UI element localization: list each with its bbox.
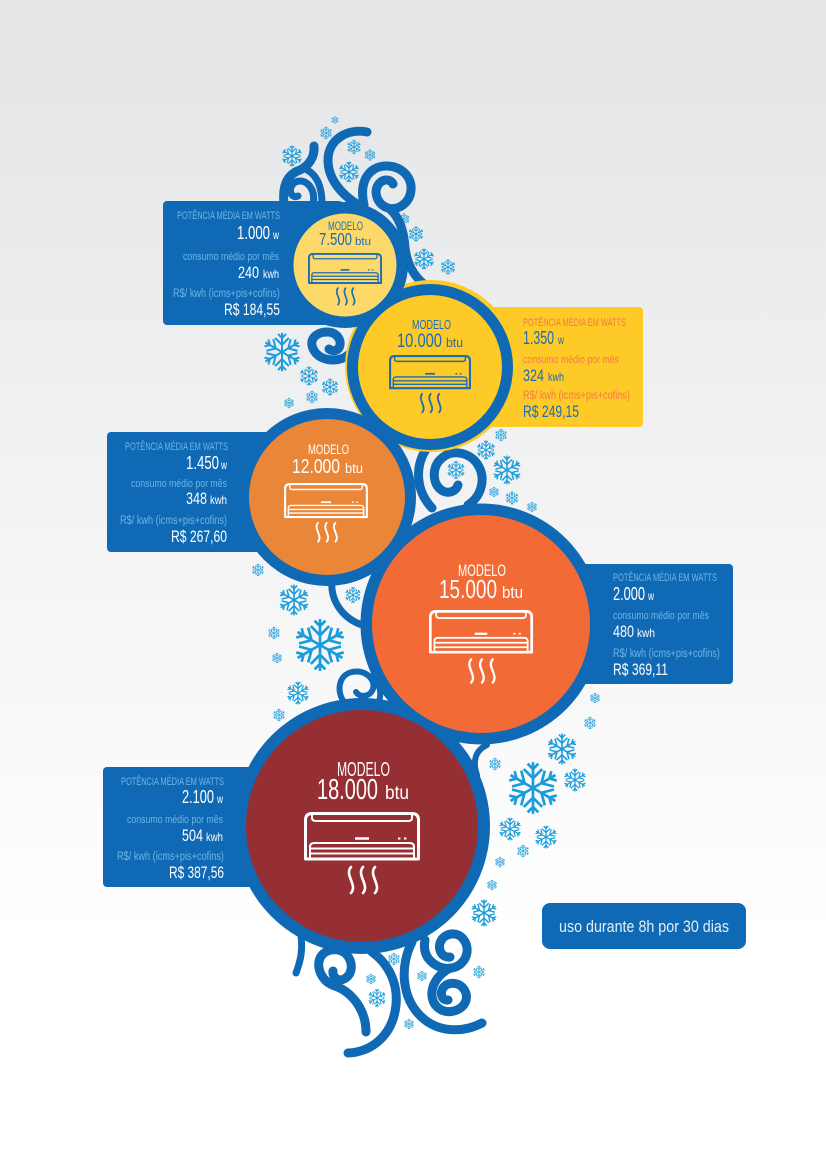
panel: 15.000 btu data: w (647, 591, 654, 603)
blue rings around circles (234, 202, 602, 954)
panel: 12.000 btu data (107, 432, 287, 552)
panel: 18.000 btu data: 504 (182, 827, 203, 845)
callout: usage note (542, 903, 746, 949)
panel: 7.500 btu data: 1.000 (237, 223, 270, 243)
panel: 10.000 btu data (463, 307, 643, 427)
circle: 10.000 btu: MODELO (412, 317, 451, 332)
panel: 7.500 btu data: w (272, 230, 279, 242)
panel: 7.500 btu data: R$ 184,55 (224, 300, 280, 319)
panel: 7.500 btu data: consumo médio por mês (183, 251, 279, 263)
panel: 12.000 btu data: 348 (186, 490, 207, 508)
circle: 12.000 btu: 12.000 (292, 455, 340, 478)
panel: 15.000 btu data: 2.000 (613, 584, 645, 604)
circle: 10.000 btu: 10.000 (397, 330, 442, 352)
panel: 15.000 btu data: 480 (613, 623, 634, 641)
circle: 10.000 btu: btu (446, 335, 463, 350)
panel: 10.000 btu data: kwh (548, 370, 564, 384)
panel: 12.000 btu data: w (220, 460, 227, 472)
panel: 7.500 btu data: 240 (238, 264, 259, 282)
panel: 10.000 btu data: consumo médio por mês (523, 354, 619, 366)
callout: usage note: uso durante 8h por 30 dias (559, 918, 729, 936)
panel: 10.000 btu data: w (557, 335, 564, 347)
panel: 15.000 btu data: consumo médio por mês (613, 610, 709, 622)
panel: 10.000 btu data: POTÊNCIA MÉDIA EM WATTS (523, 316, 626, 329)
panel: 10.000 btu data: 1.350 (523, 328, 554, 348)
panel: 15.000 btu data (553, 564, 733, 684)
circle: 12.000 btu (249, 419, 405, 575)
circle: 18.000 btu (246, 710, 478, 942)
panel: 7.500 btu data (163, 201, 343, 325)
panel: 10.000 btu data: R$/ kwh (icms+pis+cofins) (523, 390, 630, 402)
panel: 12.000 btu data: 1.450 (186, 453, 219, 473)
circle: 15.000 btu: 15.000 (439, 574, 497, 604)
panel: 12.000 btu data: R$ 267,60 (171, 527, 227, 546)
circle: 18.000 btu: MODELO (337, 759, 390, 781)
panel: 7.500 btu data: kwh (263, 267, 279, 281)
panel: 18.000 btu data: 2.100 (182, 787, 214, 807)
panel: 18.000 btu data: R$ 387,56 (169, 863, 224, 882)
circle: 10.000 btu (358, 295, 502, 439)
snowflakes (251, 116, 601, 1029)
circle: 12.000 btu: MODELO (308, 442, 349, 457)
panel: 18.000 btu data: R$/ kwh (icms+pis+cofins) (117, 851, 224, 863)
panel: 10.000 btu data: 324 (523, 367, 544, 385)
panel: 12.000 btu data: POTÊNCIA MÉDIA EM WATTS (125, 440, 228, 453)
panel: 15.000 btu data: POTÊNCIA MÉDIA EM WATTS (613, 571, 717, 584)
decorative swirls (284, 131, 487, 1053)
panel: 18.000 btu data (103, 767, 283, 887)
panel: 10.000 btu data: R$ 249,15 (523, 402, 579, 421)
panel: 18.000 btu data: w (216, 794, 223, 806)
panel: 7.500 btu data: POTÊNCIA MÉDIA EM WATTS (177, 209, 280, 222)
panel: 7.500 btu data: R$/ kwh (icms+pis+cofins) (173, 288, 280, 300)
circle: 7.500 btu: btu (355, 236, 371, 248)
circle: 7.500 btu (294, 214, 396, 316)
panel: 12.000 btu data: consumo médio por mês (131, 478, 227, 490)
panel: 12.000 btu data: R$/ kwh (icms+pis+cofins) (120, 515, 227, 527)
panel: 15.000 btu data: R$/ kwh (icms+pis+cofins) (613, 648, 720, 660)
circle: 7.500 btu: MODELO (328, 221, 363, 233)
panel: 18.000 btu data: kwh (206, 830, 223, 844)
circle: 12.000 btu: btu (345, 461, 363, 476)
yellow halo behind 10.000 btu (345, 280, 517, 452)
panel: 18.000 btu data: consumo médio por mês (127, 814, 223, 826)
panel: 15.000 btu data: kwh (637, 626, 655, 640)
panel: 18.000 btu data: POTÊNCIA MÉDIA EM WATTS (121, 775, 224, 788)
circle: 15.000 btu (372, 515, 590, 733)
panel: 12.000 btu data: kwh (210, 493, 227, 507)
circle: 7.500 btu: 7.500 (319, 229, 352, 249)
circle: 18.000 btu: 18.000 (317, 774, 378, 806)
circle: 15.000 btu: MODELO (458, 561, 506, 580)
circle: 18.000 btu: btu (385, 783, 409, 804)
panel: 15.000 btu data: R$ 369,11 (613, 660, 668, 679)
circle: 15.000 btu: btu (502, 583, 523, 602)
